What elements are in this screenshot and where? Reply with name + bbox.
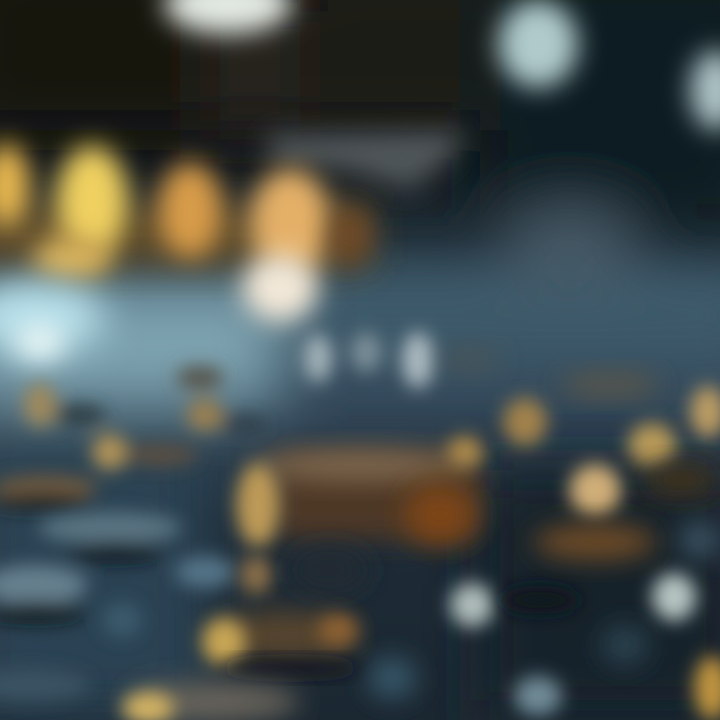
pale mid reflections (304, 332, 434, 388)
bright reflection left (0, 282, 105, 360)
left slate discs (0, 512, 235, 701)
right gold coins (440, 348, 720, 560)
warm glowing lights row (0, 143, 370, 322)
top bokeh lights (164, 0, 720, 130)
left small coins (0, 366, 269, 510)
central brown coin stack (236, 436, 483, 595)
grey streak (265, 130, 465, 190)
lower pale lights (368, 573, 696, 716)
bottom gold coins (122, 611, 720, 720)
